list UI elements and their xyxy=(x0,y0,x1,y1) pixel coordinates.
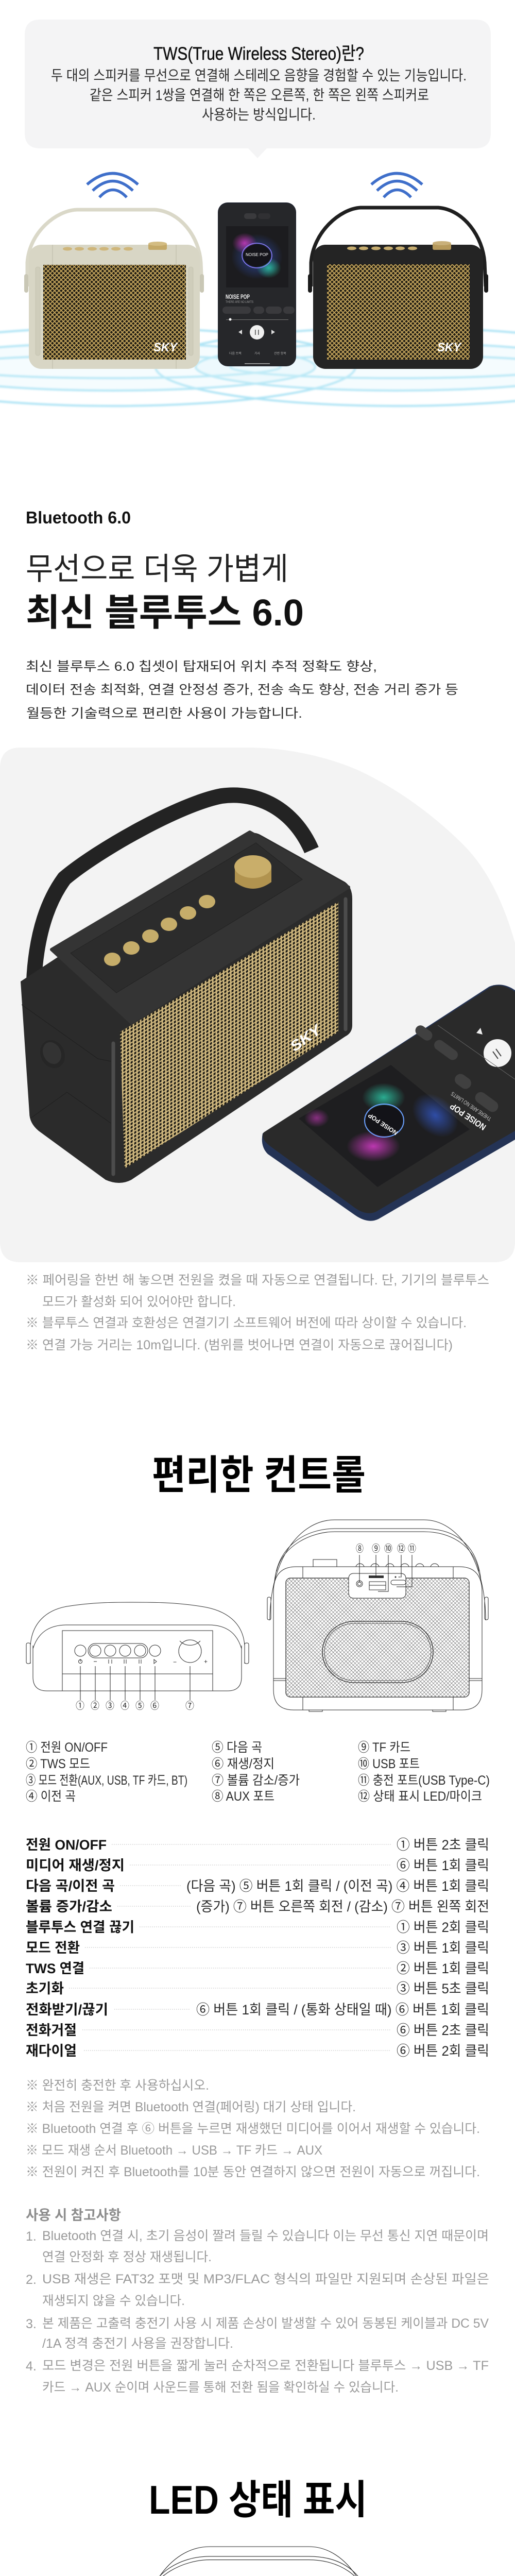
legend: numbered controls: ⑤ 다음 곡 xyxy=(212,1740,262,1755)
table: button functions: 볼륨 증가/감소 xyxy=(26,1899,112,1914)
table: button functions: ⑥ 버튼 1회 클릭 xyxy=(397,1858,489,1873)
label: Bluetooth 6.0: Bluetooth 6.0 xyxy=(26,508,131,527)
table: button functions: 초기화 xyxy=(26,1981,64,1996)
phone: music player: 가사 xyxy=(254,351,261,355)
text block: bluetooth notes: ※ 페어링을 한번 해 놓으면 전원을 켰을 때 자동으로 연결됩니다. 단, 기기의 블루투스 xyxy=(26,1273,489,1287)
text block: TWS description: 같은 스피커 1쌍을 연결해 한 쪽은 오른쪽, 한 쪽은 왼쪽 스피커로 xyxy=(90,87,429,103)
text block: usage notes: 2. xyxy=(26,2273,37,2287)
phone: music player: NOISE POP xyxy=(226,293,250,300)
big black speaker xyxy=(21,795,352,1183)
table: button functions: ⑥ 버튼 1회 클릭 / (통화 상태일 때) ⑥ 버튼 1회 클릭 xyxy=(196,2002,489,2018)
table: button functions: ② 버튼 1회 클릭 xyxy=(397,1961,489,1976)
legend: numbered controls: ③ 모드 전환(AUX, USB, TF 카드, BT) xyxy=(26,1773,187,1788)
panel: speaker and phone photo xyxy=(0,748,515,1262)
text block: usage notes: 4. xyxy=(26,2359,37,2374)
text block: bluetooth description: 데이터 전송 최적화, 연결 안정성 증가, 전송 속도 향상, 전송 거리 증가 등 xyxy=(26,683,458,697)
text block: bluetooth notes xyxy=(26,1273,489,1352)
table: button functions: 전원 ON/OFF xyxy=(26,1837,107,1853)
text block: usage notes: 1. xyxy=(26,2229,37,2244)
text block: control notes: ※ 전원이 켜진 후 Bluetooth를 10분 동안 연결하지 않으면 전원이 자동으로 꺼집니다. xyxy=(26,2165,480,2179)
diagram: top view with buttons: + xyxy=(204,1658,208,1665)
port numbers xyxy=(356,1543,416,1554)
logo: SKY on cream speaker: SKY xyxy=(153,341,178,354)
table: button functions: 모드 전환 xyxy=(26,1940,80,1956)
cream speaker xyxy=(24,210,204,369)
table: button functions: 전화거절 xyxy=(26,2023,77,2038)
phone: music player: 다음 트랙 xyxy=(229,351,242,355)
table: button functions: ⑥ 버튼 2초 클릭 xyxy=(397,2023,489,2038)
port numbers: ⑨ xyxy=(372,1543,380,1554)
text block: TWS description: 사용하는 방식입니다. xyxy=(202,107,316,123)
legend: numbered controls: ① 전원 ON/OFF xyxy=(26,1740,108,1755)
gold buttons xyxy=(104,895,215,966)
port numbers: ⑩ xyxy=(384,1543,392,1554)
album art xyxy=(226,226,288,287)
text block: control notes: ※ 처음 전원을 켜면 Bluetooth 연결(페어링) 대기 상태 입니다. xyxy=(26,2100,356,2114)
text block: usage notes: 3. xyxy=(26,2317,37,2331)
phone: music player xyxy=(218,202,296,366)
text block: bluetooth notes: ※ 블루투스 연결과 호환성은 연결기기 소프트웨어 버전에 따라 상이할 수 있습니다. xyxy=(26,1316,467,1330)
heading: LED status: LED 상태 표시 xyxy=(149,2477,367,2522)
table: button functions: ③ 버튼 5초 클릭 xyxy=(397,1981,489,1996)
legend: numbered controls: ⑫ 상태 표시 LED/마이크 xyxy=(358,1789,482,1804)
table: button functions: (증가) ⑦ 버튼 오른쪽 회전 / (감소) ⑦ 버튼 왼쪽 회전 xyxy=(196,1899,489,1914)
table: button functions: TWS 연결 xyxy=(26,1961,84,1976)
logo: SKY: SKY xyxy=(287,1021,325,1055)
table: button functions: 다음 곡/이전 곡 xyxy=(26,1878,115,1894)
icon: wifi waves left xyxy=(87,173,138,197)
button numbers: ④ xyxy=(121,1700,129,1711)
table: button functions: 블루투스 연결 끊기 xyxy=(26,1920,134,1935)
table: button functions: 재다이얼 xyxy=(26,2043,77,2059)
text block: usage notes: Bluetooth 연결 시, 초기 음성이 짤려 들릴 수 있습니다 이는 무선 통신 지연 때문이며 xyxy=(42,2229,489,2243)
button numbers: ② xyxy=(91,1700,99,1711)
text block: bluetooth description xyxy=(26,659,458,721)
text block: usage notes: USB 재생은 FAT32 포맷 및 MP3/FLAC 형식의 파일만 지원되며 손상된 파일은 xyxy=(42,2272,489,2286)
text block: control notes xyxy=(26,2078,480,2179)
text block: usage notes: 카드 → AUX 순이며 사운드를 통해 전환 됨을 확인하실 수 있습니다. xyxy=(42,2380,399,2395)
legend: numbered controls: ⑦ 볼륨 감소/증가 xyxy=(212,1773,300,1788)
legend: numbered controls: ⑨ TF 카드 xyxy=(358,1740,410,1755)
text block: control notes: ※ 완전히 충전한 후 사용하십시오. xyxy=(26,2078,209,2093)
table: button functions xyxy=(26,1837,489,2059)
speaker handle hub xyxy=(36,1036,70,1072)
ripple waves under speakers xyxy=(0,328,515,406)
phone lying down: THERE ARE NO LIMITS xyxy=(450,1090,493,1122)
text block: usage notes xyxy=(26,2208,489,2395)
panel: TWS speech bubble xyxy=(25,20,491,158)
logo: SKY on black speaker: SKY xyxy=(437,341,462,354)
button numbers: ③ xyxy=(106,1700,114,1711)
text block: bluetooth description: 월등한 기술력으로 편리한 사용이 가능합니다. xyxy=(26,706,302,721)
phone: music player: THERE ARE NO LIMITS xyxy=(226,300,254,304)
table: button functions: ⑥ 버튼 2회 클릭 xyxy=(397,2043,489,2059)
text block: control notes: ※ 모드 재생 순서 Bluetooth → USB → TF 카드 → AUX xyxy=(26,2143,322,2158)
button numbers: ⑤ xyxy=(135,1700,144,1711)
legend: numbered controls: ⑧ AUX 포트 xyxy=(212,1789,274,1804)
port numbers: ⑧ xyxy=(356,1543,364,1554)
album art xyxy=(299,1065,470,1187)
text block: bluetooth notes: 모드가 활성화 되어 있어야만 합니다. xyxy=(42,1295,236,1309)
diagram: top view with buttons: − xyxy=(173,1658,177,1666)
button numbers: ① xyxy=(76,1700,84,1711)
text block: bluetooth description: 최신 블루투스 6.0 칩셋이 탑재되어 위치 추적 정확도 향상, xyxy=(26,659,377,674)
diagram: back view with ports xyxy=(267,1520,488,1711)
phone: music player: 관련 항목 xyxy=(274,351,286,355)
table: button functions: ③ 버튼 1회 클릭 xyxy=(397,1940,489,1956)
text block: usage notes: /1A 정격 충전기 사용을 권장합니다. xyxy=(42,2336,233,2351)
black speaker xyxy=(308,208,488,369)
play button xyxy=(484,1039,511,1067)
diagram: top view with buttons xyxy=(26,1602,249,1711)
heading: latest bluetooth 6.0: 최신 블루투스 6.0 xyxy=(26,592,304,634)
legend: numbered controls: ⑪ 충전 포트(USB Type-C) xyxy=(358,1773,490,1788)
text block: TWS description: 두 대의 스피커를 무선으로 연결해 스테레오 음향을 경험할 수 있는 기능입니다. xyxy=(51,67,467,83)
text block: usage notes: 사용 시 참고사항 xyxy=(26,2208,121,2223)
table: button functions: (다음 곡) ⑤ 버튼 1회 클릭 / (이전 곡) ④ 버튼 1회 클릭 xyxy=(186,1878,489,1894)
legend: numbered controls xyxy=(26,1740,490,1804)
button numbers xyxy=(76,1700,194,1711)
port numbers: ⑫ xyxy=(397,1543,405,1554)
legend: numbered controls: ⑩ USB 포트 xyxy=(358,1757,420,1771)
text block: control notes: ※ Bluetooth 연결 후 ⑥ 버튼을 누르면 재생했던 미디어를 이어서 재생할 수 있습니다. xyxy=(26,2122,480,2136)
legend: numbered controls: ② TWS 모드 xyxy=(26,1757,90,1771)
button numbers: ⑦ xyxy=(185,1700,194,1711)
heading: wireless lighter: 무선으로 더욱 가볍게 xyxy=(26,552,288,586)
text block: TWS description xyxy=(51,67,467,123)
table: button functions: ① 버튼 2회 클릭 xyxy=(397,1920,489,1935)
table: button functions: ① 버튼 2초 클릭 xyxy=(397,1837,489,1853)
button numbers: ⑥ xyxy=(150,1700,159,1711)
text block: usage notes: 모드 변경은 전원 버튼을 짧게 눌러 순차적으로 전환됩니다 블루투스 → USB → TF xyxy=(42,2359,489,2373)
text block: bluetooth notes: ※ 연결 가능 거리는 10m입니다. (범위를 벗어나면 연결이 자동으로 끊어집니다) xyxy=(26,1338,453,1352)
text block: usage notes: 본 제품은 고출력 충전기 사용 시 제품 손상이 발생할 수 있어 동봉된 케이블과 DC 5V xyxy=(42,2316,489,2331)
text block: usage notes: 재생되지 않을 수 있습니다. xyxy=(42,2294,185,2308)
icon: wifi waves right xyxy=(371,173,422,197)
legend: numbered controls: ④ 이전 곡 xyxy=(26,1789,76,1804)
diagram: LED position back view xyxy=(135,2547,380,2576)
heading: convenient controls: 편리한 컨트롤 xyxy=(152,1452,366,1498)
phone lying down xyxy=(262,985,515,1221)
heading: TWS question: TWS(True Wireless Stereo)란? xyxy=(153,44,364,64)
album art: NOISE POP xyxy=(367,1112,399,1137)
table: button functions: 미디어 재생/정지 xyxy=(26,1858,125,1873)
phone lying down: NOISE POP xyxy=(448,1101,488,1132)
gold knob xyxy=(234,855,271,889)
text block: usage notes: 연결 안정화 후 정상 재생됩니다. xyxy=(42,2250,212,2264)
table: button functions: 전화받기/끊기 xyxy=(26,2002,108,2018)
legend: numbered controls: ⑥ 재생/정지 xyxy=(212,1757,274,1771)
port numbers: ⑪ xyxy=(408,1543,416,1554)
album art: NOISE POP xyxy=(246,252,268,257)
